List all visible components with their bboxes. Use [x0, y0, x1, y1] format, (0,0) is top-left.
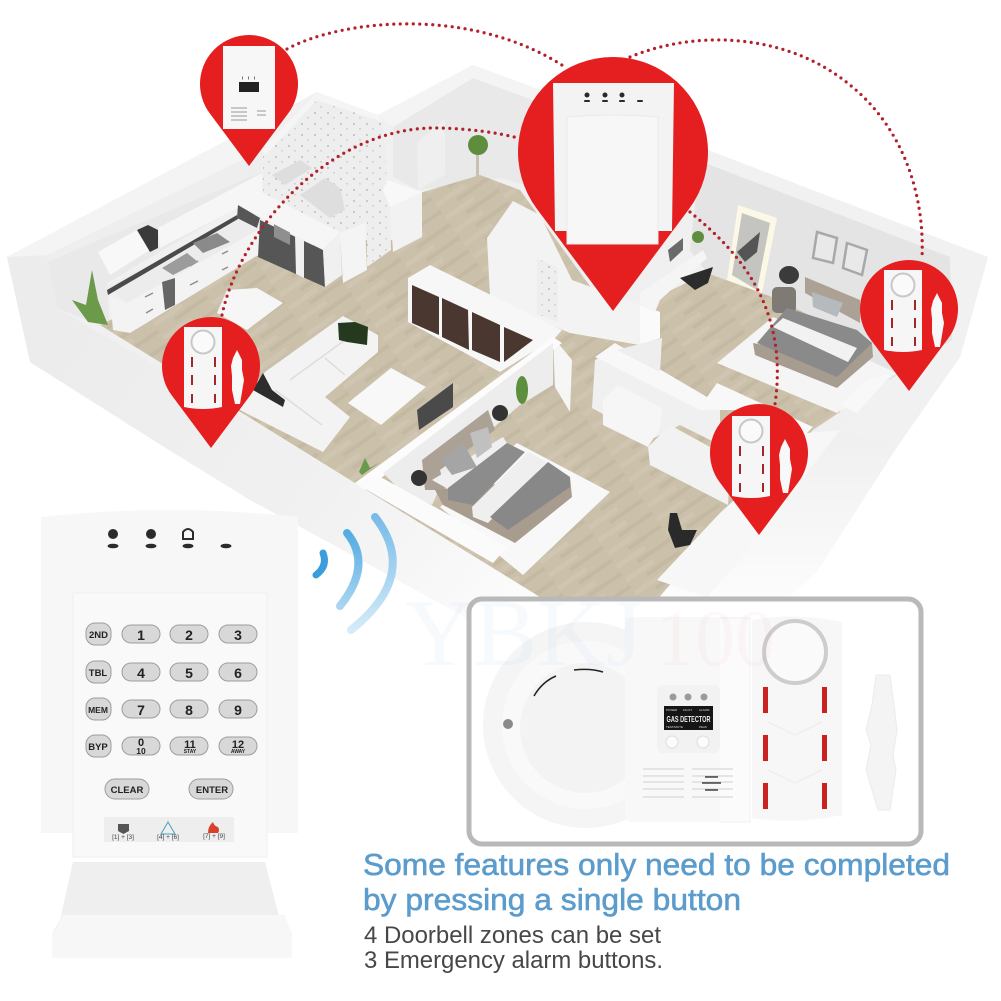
bedroom front wall cap	[355, 475, 507, 563]
block end	[640, 305, 660, 345]
open door	[617, 338, 662, 372]
bathroom wall block right	[390, 192, 422, 252]
nightstand and lamp	[772, 266, 799, 313]
bathroom fixtures	[272, 160, 345, 218]
cabinet handles	[145, 251, 228, 313]
line: keypad to right alarm	[630, 40, 922, 258]
key labels: 6	[234, 665, 242, 681]
back room wall	[393, 78, 560, 195]
central door	[553, 337, 572, 412]
lower chair	[668, 513, 697, 548]
dark tall cabinets	[237, 205, 325, 287]
key labels: 3	[234, 627, 242, 643]
key labels: 9	[234, 702, 242, 718]
gas detector: FAULT	[683, 708, 692, 712]
keypad flap	[52, 862, 292, 958]
dotted connection lines	[222, 24, 922, 404]
heading	[363, 847, 950, 917]
middle block walls	[487, 201, 660, 345]
key labels: STAY	[184, 749, 197, 755]
pin: control panel	[518, 57, 708, 311]
desk	[640, 250, 707, 312]
kitchen counter strip	[107, 215, 238, 295]
right bed	[753, 277, 873, 388]
bookshelf shelves	[412, 285, 533, 362]
key labels: ENTER	[196, 785, 228, 796]
kitchen worktop	[107, 218, 258, 303]
watermark: YBKJ	[405, 580, 643, 686]
right room rug	[717, 317, 897, 413]
status leds	[108, 529, 232, 548]
wood floor	[100, 175, 860, 600]
wireless signal waves	[316, 517, 393, 630]
monitor	[668, 238, 683, 262]
dishwasher	[162, 278, 175, 310]
right wall cap	[700, 147, 988, 447]
bookshelf frame	[408, 265, 562, 372]
upper cabinet right	[158, 173, 262, 248]
emergency legend strip	[104, 817, 234, 842]
dresser	[603, 385, 662, 447]
gas detector: ALARM	[699, 708, 710, 712]
key labels: 10	[136, 746, 146, 756]
key labels: 5	[185, 665, 193, 681]
lower desk	[657, 430, 840, 597]
watermark: 100	[655, 595, 775, 683]
cabinet tall stack	[295, 235, 304, 278]
gas detector: PEAK	[699, 725, 707, 729]
kitchen sink	[162, 253, 198, 275]
dark cushion	[253, 373, 285, 407]
flap lip	[52, 915, 292, 958]
green pillows	[338, 322, 368, 345]
smoke detector	[483, 622, 689, 828]
key labels: 7	[137, 702, 145, 718]
emergency legend strip: [1] + [3]	[112, 834, 134, 841]
key labels: TBL	[89, 668, 107, 679]
small sofa	[648, 425, 730, 505]
upper cabinet left	[98, 230, 150, 275]
heading: by pressing a single button	[363, 882, 741, 917]
tv	[417, 383, 453, 430]
kitchen lower cabinets	[110, 230, 258, 333]
bedroom lamps	[411, 405, 508, 486]
partition wall face	[383, 343, 553, 505]
pin: lower door alarm	[710, 404, 808, 535]
key labels: 2ND	[89, 630, 108, 641]
remote fob	[866, 675, 897, 810]
front wall	[7, 255, 590, 640]
tall cabinet end	[323, 232, 342, 287]
lower bedroom plant	[516, 376, 528, 417]
wall cap back middle	[378, 65, 560, 127]
key labels: BYP	[88, 742, 108, 753]
heading: Some features only need to be completed	[363, 847, 950, 882]
floor plan	[7, 65, 988, 640]
key labels: MEM	[88, 705, 108, 715]
coffee table	[348, 368, 426, 425]
plant	[468, 135, 488, 180]
wall frames	[813, 232, 867, 275]
feature description: 3 Emergency alarm buttons.	[364, 947, 663, 974]
key labels: AWAY	[231, 749, 246, 755]
pin: right door alarm	[860, 260, 958, 391]
key labels: CLEAR	[111, 785, 143, 796]
line: gas detector to keypad	[287, 24, 565, 67]
bathroom wall block front	[340, 223, 367, 283]
keypad keys	[86, 623, 257, 799]
key labels: 12	[232, 739, 244, 751]
line: left alarm to keypad	[222, 128, 518, 315]
kitchen hob	[193, 233, 230, 253]
lower bed	[422, 410, 572, 543]
door alarm	[752, 616, 842, 821]
gas detector: GAS DETECTOR	[666, 714, 710, 724]
back room door	[417, 118, 445, 190]
feature description	[364, 922, 663, 974]
back wall left	[47, 168, 262, 330]
keypad body	[41, 510, 298, 833]
pin: gas detector	[200, 35, 298, 166]
kitchen plant	[72, 270, 108, 325]
dining table	[217, 288, 283, 330]
lower hall wall top	[595, 343, 813, 440]
product frame	[469, 599, 921, 844]
feature description: 4 Doorbell zones can be set	[364, 922, 661, 949]
right dresser	[840, 373, 893, 413]
key labels: 11	[184, 739, 196, 751]
key labels	[88, 627, 246, 796]
mirror	[727, 205, 777, 293]
line: keypad to lower alarm	[690, 212, 777, 404]
wall band above kitchen	[47, 150, 262, 262]
gas detector	[625, 617, 750, 822]
bathroom block cap	[383, 180, 422, 207]
lower hall wall face	[592, 350, 720, 445]
partition wall top	[355, 337, 562, 490]
outer building shell	[7, 65, 988, 640]
key labels: 2	[185, 627, 193, 643]
wall cap back left	[7, 140, 262, 257]
watermark	[405, 580, 775, 686]
living room plant	[359, 458, 380, 475]
key panel	[73, 593, 267, 857]
key labels: 0	[138, 737, 144, 749]
kitchen hood	[137, 225, 158, 252]
key labels: 4	[137, 665, 145, 681]
bathroom mosaic wall	[263, 97, 391, 267]
lower bedroom rug	[440, 443, 610, 575]
emergency legend strip: [7] + [9]	[203, 833, 225, 840]
desk plant	[692, 231, 704, 243]
gas detector: TEST/MUTE	[666, 725, 683, 729]
middle bathroom mosaic	[537, 258, 558, 322]
keypad control panel	[41, 510, 298, 958]
office chair	[680, 267, 713, 290]
emergency legend strip: [4] + [6]	[157, 834, 179, 841]
oven	[274, 223, 290, 245]
tall cabinet cap	[238, 193, 340, 250]
right bedroom wall	[690, 161, 952, 380]
key labels: 1	[137, 627, 145, 643]
gas detector: POWER	[666, 708, 678, 712]
wall cap above bathroom	[262, 92, 383, 155]
key labels: 8	[185, 702, 193, 718]
pin: left door alarm	[162, 317, 260, 448]
living sofa	[240, 316, 378, 452]
